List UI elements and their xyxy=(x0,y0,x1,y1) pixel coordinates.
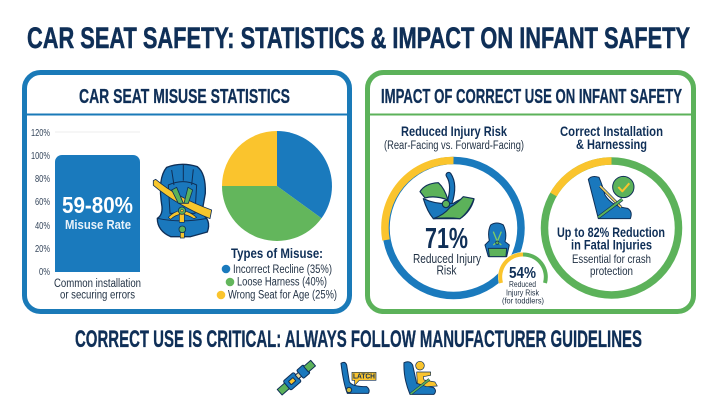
pie slice: wrong seat xyxy=(222,131,277,186)
latch label: LATCH xyxy=(353,374,375,381)
y axis labels: 60% xyxy=(35,197,50,208)
column heading: Correct Installation xyxy=(560,123,663,139)
y axis labels: 40% xyxy=(35,221,50,232)
callout: 54% toddlers xyxy=(498,252,548,306)
bar label: Misuse Rate xyxy=(65,217,131,232)
value label: Reduced Injury xyxy=(413,252,482,266)
legend item: recline: Incorrect Recline (35%) xyxy=(233,264,332,276)
callout subtext xyxy=(572,252,651,278)
legend item: harness: Loose Harness (40%) xyxy=(237,276,327,288)
y axis labels: 0% xyxy=(39,267,50,278)
y axis labels: 80% xyxy=(35,174,50,185)
callout: 54% toddlers: Injury Risk xyxy=(506,288,540,298)
icon: seat with check xyxy=(588,176,634,219)
column heading: & Harnessing xyxy=(576,136,647,152)
bar caption: or securing errors xyxy=(60,290,135,302)
callout text xyxy=(557,224,665,252)
column heading xyxy=(560,123,663,152)
bar chart xyxy=(31,128,141,302)
callout: 54% toddlers: 54% xyxy=(509,265,536,282)
panel: impact of correct use xyxy=(368,72,694,312)
pie slice: incorrect recline xyxy=(277,131,332,218)
y axis labels: 100% xyxy=(31,151,50,162)
y axis labels xyxy=(31,128,50,278)
heading: misuse statistics: CAR SEAT MISUSE STATISTICS xyxy=(79,86,290,108)
column: correct installation xyxy=(544,123,678,295)
value: 71%: 71% xyxy=(425,223,468,255)
callout text: in Fatal Injuries xyxy=(571,236,652,252)
panel: misuse statistics xyxy=(24,72,350,312)
legend item: wrong seat: Wrong Seat for Age (25%) xyxy=(228,290,337,302)
value label: Risk xyxy=(436,264,457,278)
donut ring xyxy=(385,160,521,296)
icon: toddler seat xyxy=(485,223,509,257)
pie slice: loose harness xyxy=(222,186,322,241)
legend xyxy=(217,245,337,302)
value label xyxy=(413,252,482,278)
icon: child in booster seat xyxy=(404,361,437,394)
icon: blue car seat xyxy=(153,164,212,238)
callout: 54% toddlers: Reduced xyxy=(509,280,536,289)
donut ring xyxy=(544,161,678,295)
column heading: Reduced Injury Risk xyxy=(401,123,507,139)
pie chart xyxy=(222,131,332,241)
icon: seat belt buckle xyxy=(276,359,317,397)
callout subtext: Essential for crash xyxy=(572,252,651,266)
callout subtext: protection xyxy=(590,264,633,278)
bar caption: Common installation xyxy=(54,278,141,290)
bar caption xyxy=(54,278,141,302)
icon: infant carrier xyxy=(420,175,474,219)
callout: 54% toddlers: (for toddlers) xyxy=(502,296,544,306)
y axis labels: 120% xyxy=(31,128,50,139)
legend title: Types of Misuse: xyxy=(231,245,323,261)
bar value: 59-80% xyxy=(62,192,133,218)
y axis labels: 20% xyxy=(35,244,50,255)
column: reduced injury risk xyxy=(384,123,548,306)
column subheading: (Rear-Facing vs. Forward-Facing) xyxy=(384,140,524,152)
bar xyxy=(55,155,140,272)
icon: LATCH seat xyxy=(341,362,376,393)
callout text: Up to 82% Reduction xyxy=(557,224,665,240)
